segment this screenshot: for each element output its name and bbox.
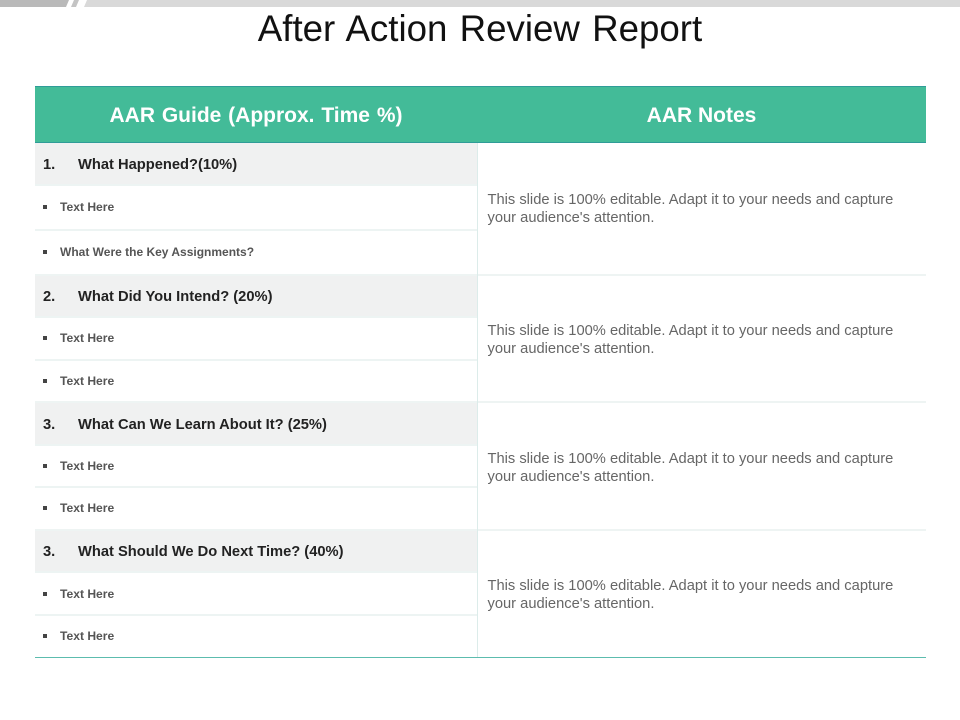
section 4 heading: 3. [43,544,55,560]
section band 2 [35,275,477,317]
note 4 [488,578,893,612]
table header [35,86,926,143]
section 4 item 1: Text Here [60,587,114,601]
section 2 heading: What Did You Intend? (20%) [78,289,272,305]
header: AAR Notes: AAR Notes [647,104,756,127]
section 3 item 2: Text Here [60,501,114,515]
section 3 heading: What Can We Learn About It? (25%) [78,417,327,433]
note 3 [488,451,893,485]
section band 4 [35,530,477,572]
top decorative bar [0,0,960,7]
note 3: your audience's attention. [488,469,654,485]
section 1 heading: What Happened?(10%) [78,157,237,173]
note 1: This slide is 100% editable. Adapt it to your needs and capture [488,192,893,208]
note 4: your audience's attention. [488,596,654,612]
note 2: your audience's attention. [488,341,654,357]
section 4 heading: What Should We Do Next Time? (40%) [78,544,344,560]
note 3: This slide is 100% editable. Adapt it to your needs and capture [488,451,893,467]
title: After Action Review Report [258,8,702,49]
section 2 heading: 2. [43,289,55,305]
section 1 item 1: Text Here [60,200,114,214]
section 3 item 1: Text Here [60,459,114,473]
section 2 item 2: Text Here [60,374,114,388]
note 1 [488,192,893,226]
header: AAR Guide: AAR Guide (Approx. Time %) [110,104,402,127]
note 4: This slide is 100% editable. Adapt it to your needs and capture [488,578,893,594]
section band 1 [35,143,477,185]
note 2 [488,323,893,357]
section 2 item 1: Text Here [60,331,114,345]
section 1 heading: 1. [43,157,55,173]
section 4 item 2: Text Here [60,629,114,643]
section 3 heading: 3. [43,417,55,433]
note 2: This slide is 100% editable. Adapt it to your needs and capture [488,323,893,339]
note 1: your audience's attention. [488,210,654,226]
section 1 item 2: What Were the Key Assignments? [60,245,254,259]
section band 3 [35,402,477,444]
